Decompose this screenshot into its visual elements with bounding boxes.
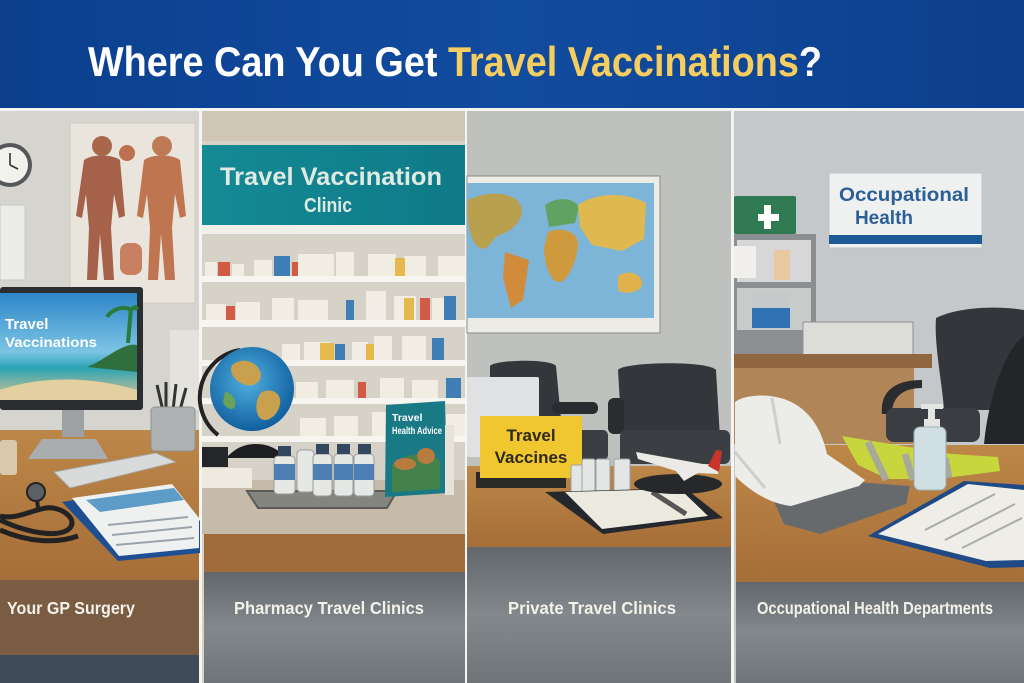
bottle	[0, 440, 17, 475]
hand sanitiser	[914, 404, 946, 490]
icon: wall clock	[0, 143, 32, 187]
clipboard	[545, 488, 723, 534]
hi-vis vest	[842, 436, 1000, 479]
wall notice	[0, 205, 25, 280]
shelf items	[170, 330, 199, 410]
header banner	[0, 0, 1024, 108]
sideboard	[734, 354, 932, 368]
folded work clothes	[768, 480, 910, 534]
panel: occupational health	[734, 111, 1024, 683]
base	[467, 547, 731, 683]
model plane	[634, 450, 722, 494]
monitor text: Travel	[5, 316, 48, 333]
clinic sign: Clinic	[304, 195, 352, 217]
pen pot	[151, 382, 195, 451]
clinic sign: Travel Vaccination	[220, 163, 442, 191]
cabinet	[734, 234, 816, 358]
counter	[202, 480, 465, 534]
clipboard	[62, 484, 200, 561]
monitor with beach screen	[0, 287, 143, 459]
waiting chairs	[490, 361, 730, 464]
desk	[467, 466, 731, 547]
keyboard	[54, 453, 176, 488]
office chairs	[882, 308, 1024, 444]
vaccine tray	[247, 444, 397, 508]
clipboard form	[868, 481, 1024, 568]
book: travel health advice: Health Advice	[392, 425, 442, 437]
first aid box	[734, 196, 796, 234]
clinic sign	[202, 145, 465, 234]
book: travel health advice: Travel	[392, 412, 422, 424]
occupational health sign	[829, 173, 982, 248]
book stack and phone	[202, 447, 252, 488]
label base	[0, 580, 199, 655]
pharmacy shelves	[202, 252, 465, 442]
desk	[0, 430, 199, 580]
travel vaccines sign: Vaccines	[495, 448, 567, 467]
occupational health sign: Health	[855, 208, 913, 229]
globe	[200, 347, 294, 458]
desk	[736, 445, 1024, 582]
stethoscope	[0, 508, 78, 541]
anatomy poster	[70, 123, 195, 303]
base	[736, 582, 1024, 683]
occupational health sign: Occupational	[839, 185, 969, 206]
travel vaccines sign: Travel	[506, 426, 556, 445]
hard hat	[735, 396, 865, 506]
vials	[571, 459, 630, 494]
book: travel health advice	[385, 401, 454, 497]
panel: private clinic	[467, 111, 731, 683]
panel: GP surgery	[0, 111, 200, 683]
label: Pharmacy Travel Clinics	[234, 598, 424, 618]
label: Private Travel Clinics	[508, 598, 676, 618]
travel vaccines sign	[476, 416, 582, 488]
title: Where Can You Get Travel Vaccinations?	[88, 38, 822, 85]
supply box	[803, 322, 913, 357]
base	[204, 572, 465, 683]
label: Your GP Surgery	[7, 598, 135, 618]
monitor text: Vaccinations	[5, 334, 97, 350]
world map	[467, 176, 660, 333]
laptop	[467, 377, 539, 457]
panel: pharmacy	[200, 111, 465, 683]
